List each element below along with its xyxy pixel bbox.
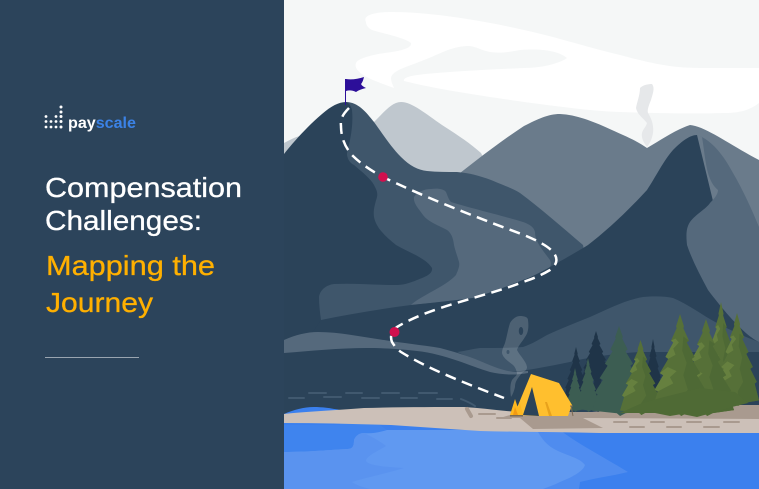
lake light water — [284, 430, 585, 489]
campfire smoke — [502, 316, 528, 397]
green pine trees — [620, 302, 759, 417]
middle mountain range — [440, 114, 759, 300]
heading: Challenges: — [45, 205, 202, 236]
distant smoke — [636, 84, 654, 147]
subheading — [46, 250, 215, 318]
left peak dark face — [284, 102, 432, 350]
shaded ground — [500, 405, 759, 429]
lake — [284, 420, 759, 489]
sky background — [284, 0, 759, 489]
payscale logo — [45, 106, 136, 132]
subheading: Mapping the — [46, 250, 215, 281]
divider line — [45, 357, 139, 358]
foothill wisps — [289, 393, 475, 406]
checkpoint: lower — [390, 327, 400, 337]
lake mid-tone — [500, 430, 628, 489]
tree skirt — [620, 388, 748, 417]
light slope region — [411, 189, 551, 305]
dark pine trees — [564, 331, 664, 412]
right lit face of front mountain — [686, 135, 759, 342]
summit flag — [346, 77, 366, 105]
mid-tone valley band — [457, 296, 759, 372]
tent — [514, 374, 573, 416]
sand marks — [467, 409, 739, 427]
checkpoint: upper — [378, 172, 388, 182]
light mist band — [284, 332, 528, 375]
subheading: Journey — [46, 287, 153, 318]
ridge mid-tone slope — [300, 102, 600, 340]
logo dots — [45, 106, 62, 128]
left panel — [0, 0, 284, 489]
lake ripple — [284, 433, 404, 489]
logo wordmark: payscale — [68, 115, 136, 132]
campfire — [510, 399, 523, 416]
back mountain — [284, 102, 500, 190]
dashed trail — [341, 108, 556, 398]
beach sand — [284, 405, 759, 433]
teal pine trees — [566, 326, 646, 416]
clouds — [356, 12, 759, 113]
heading — [45, 172, 242, 236]
front mountain — [284, 135, 759, 489]
lake dark corner — [284, 420, 387, 452]
heading: Compensation — [45, 172, 242, 203]
back water strip — [284, 407, 340, 425]
